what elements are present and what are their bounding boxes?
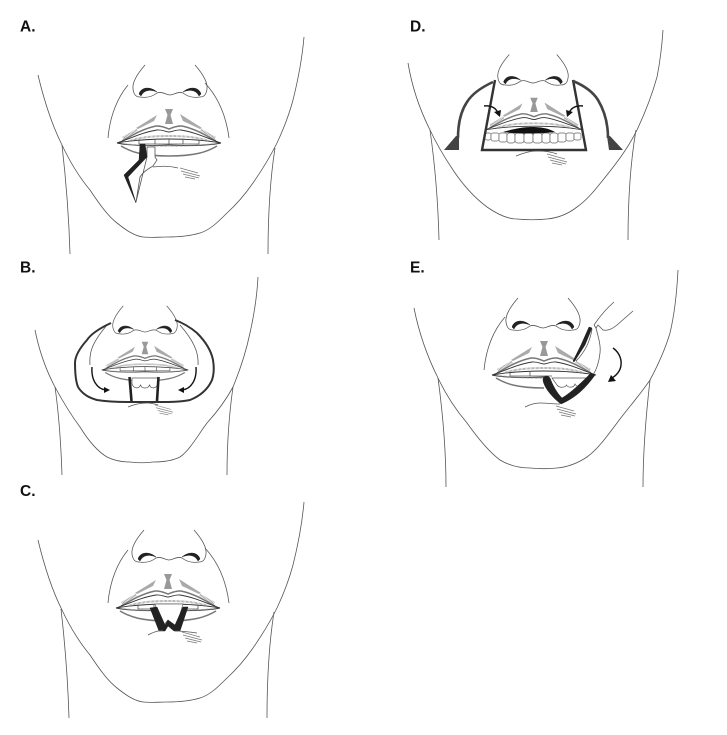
right curved flap D: [573, 81, 623, 150]
neck lines D: [430, 130, 636, 240]
panel C: face with W-shaped incision: [38, 502, 304, 718]
teeth D: [485, 133, 581, 143]
chin crease C: [148, 630, 197, 635]
curved arrow E: [608, 348, 621, 382]
label B: B.: [20, 260, 36, 276]
chin hatch E: [556, 406, 576, 417]
outer flap incision B: [75, 320, 214, 402]
W incision C: [150, 607, 188, 631]
chin hatch C: [182, 632, 202, 643]
label E: E.: [410, 260, 425, 276]
face outline A: [38, 37, 304, 237]
nose A: [133, 65, 207, 97]
open mouth D: [503, 127, 555, 134]
zigzag incision A: [124, 144, 147, 203]
nasolabial folds A: [108, 83, 229, 138]
upper flap incision E: [573, 327, 592, 362]
chin crease D: [516, 151, 557, 156]
neck lines E: [438, 378, 650, 487]
label D: D.: [410, 18, 426, 36]
arrow left B: [92, 367, 110, 393]
panel B: face with bilateral advancement flaps: [35, 277, 258, 475]
nose E: [506, 298, 580, 330]
tooth line E: [510, 372, 552, 376]
chin crease B: [128, 403, 158, 407]
nose B: [113, 306, 177, 334]
lips E: [492, 341, 596, 388]
face outline C: [38, 502, 304, 702]
nasolabial folds B: [90, 325, 198, 365]
teeth B: [132, 378, 158, 388]
face outline B: [35, 277, 258, 463]
panel D: face with bilateral flaps: [408, 30, 663, 240]
arrow left D: [484, 106, 501, 117]
nose D: [498, 54, 568, 85]
neck lines C: [61, 609, 274, 718]
neck lines A: [62, 145, 275, 254]
panel A: face with zigzag lip incision: [38, 37, 304, 254]
chin hatch D: [547, 154, 567, 165]
nose C: [132, 530, 206, 562]
incision frame D: [482, 80, 586, 150]
flap edge E: [576, 328, 600, 375]
V incision E: [543, 373, 595, 404]
face outline E: [414, 270, 678, 469]
forceps and fingers E: [594, 302, 633, 330]
teeth C: [155, 604, 183, 628]
chin crease A: [153, 166, 178, 168]
nasolabial fold E: [484, 317, 505, 370]
lips A: [117, 109, 221, 156]
arrow right B: [178, 367, 196, 393]
lips B: [102, 342, 188, 381]
chin crease E: [525, 403, 560, 407]
label A: A.: [20, 18, 36, 36]
lips D: [485, 98, 583, 130]
vertical incisions B: [130, 377, 158, 401]
chin hatch A: [180, 168, 200, 179]
lips C: [116, 574, 220, 621]
nasolabial folds C: [108, 548, 229, 603]
arrow right D: [566, 106, 583, 117]
flap outline A: [136, 147, 157, 202]
label C: C.: [20, 483, 36, 500]
teeth E: [552, 378, 590, 387]
neck lines B: [55, 387, 233, 475]
face outline D: [408, 30, 663, 220]
panel E: face with rotated flap and forceps: [414, 270, 678, 487]
chin hatch B: [155, 405, 173, 415]
left curved flap D: [444, 82, 493, 150]
